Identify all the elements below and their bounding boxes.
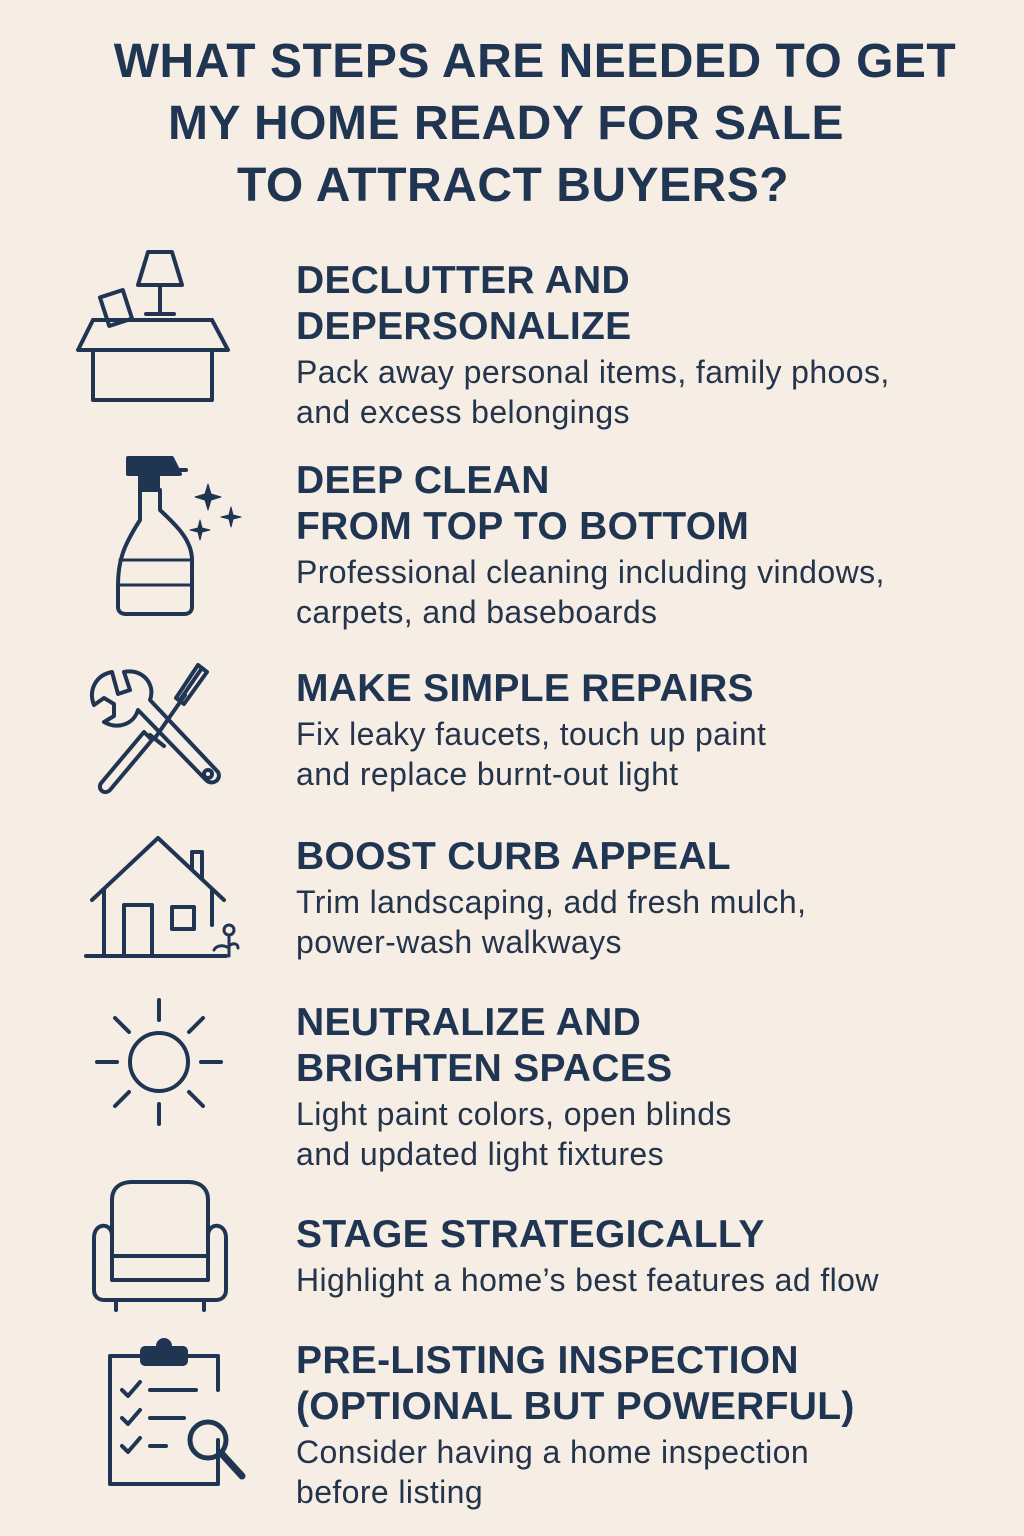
step 7 text bbox=[296, 1339, 855, 1510]
title: TO ATTRACT BUYERS? bbox=[237, 159, 789, 212]
step 2 text: Professional cleaning including vindows, bbox=[296, 554, 885, 590]
title: WHAT STEPS ARE NEEDED TO GET bbox=[114, 35, 956, 88]
icon: clipboard checklist bbox=[110, 1340, 242, 1484]
step 1 text bbox=[296, 259, 890, 430]
icon: spray bottle bbox=[118, 458, 241, 614]
icon: house bbox=[86, 838, 238, 956]
step 3 text: and replace burnt-out light bbox=[296, 756, 679, 792]
title bbox=[114, 35, 956, 212]
step 3 text bbox=[296, 667, 766, 792]
step 4 text: power-wash walkways bbox=[296, 924, 622, 960]
step 4 text bbox=[296, 835, 806, 960]
step 5 text: BRIGHTEN SPACES bbox=[296, 1047, 672, 1090]
step 1 text: Pack away personal items, family phoos, bbox=[296, 354, 890, 390]
step 7 text: Consider having a home inspection bbox=[296, 1434, 809, 1470]
icon: armchair bbox=[94, 1182, 226, 1310]
step 2 text: DEEP CLEAN bbox=[296, 459, 550, 502]
step 6 text: Highlight a home’s best features ad flow bbox=[296, 1262, 879, 1298]
step 5 text: NEUTRALIZE AND bbox=[296, 1001, 641, 1044]
title: MY HOME READY FOR SALE bbox=[168, 97, 844, 150]
step 5 text bbox=[296, 1001, 732, 1172]
step 4 text: BOOST CURB APPEAL bbox=[296, 835, 731, 878]
icon: wrench and screwdriver bbox=[92, 665, 219, 792]
step 1 text: DECLUTTER AND bbox=[296, 259, 630, 302]
step 2 text: FROM TOP TO BOTTOM bbox=[296, 505, 749, 548]
step 1 text: and excess belongings bbox=[296, 394, 630, 430]
step 6 text: STAGE STRATEGICALLY bbox=[296, 1213, 765, 1256]
step 5 text: and updated light fixtures bbox=[296, 1136, 664, 1172]
step 1 text: DEPERSONALIZE bbox=[296, 305, 631, 348]
step 7 text: PRE-LISTING INSPECTION bbox=[296, 1339, 799, 1382]
step 2 text bbox=[296, 459, 885, 630]
step 3 text: Fix leaky faucets, touch up paint bbox=[296, 716, 766, 752]
step 7 text: before listing bbox=[296, 1474, 483, 1510]
step 2 text: carpets, and baseboards bbox=[296, 594, 657, 630]
step 4 text: Trim landscaping, add fresh mulch, bbox=[296, 884, 806, 920]
icon: sun bbox=[97, 1000, 221, 1124]
step 3 text: MAKE SIMPLE REPAIRS bbox=[296, 667, 754, 710]
step 6 text bbox=[296, 1213, 879, 1298]
step 5 text: Light paint colors, open blinds bbox=[296, 1096, 732, 1132]
icon: box with lamp bbox=[78, 252, 228, 400]
step 7 text: (OPTIONAL BUT POWERFUL) bbox=[296, 1385, 855, 1428]
